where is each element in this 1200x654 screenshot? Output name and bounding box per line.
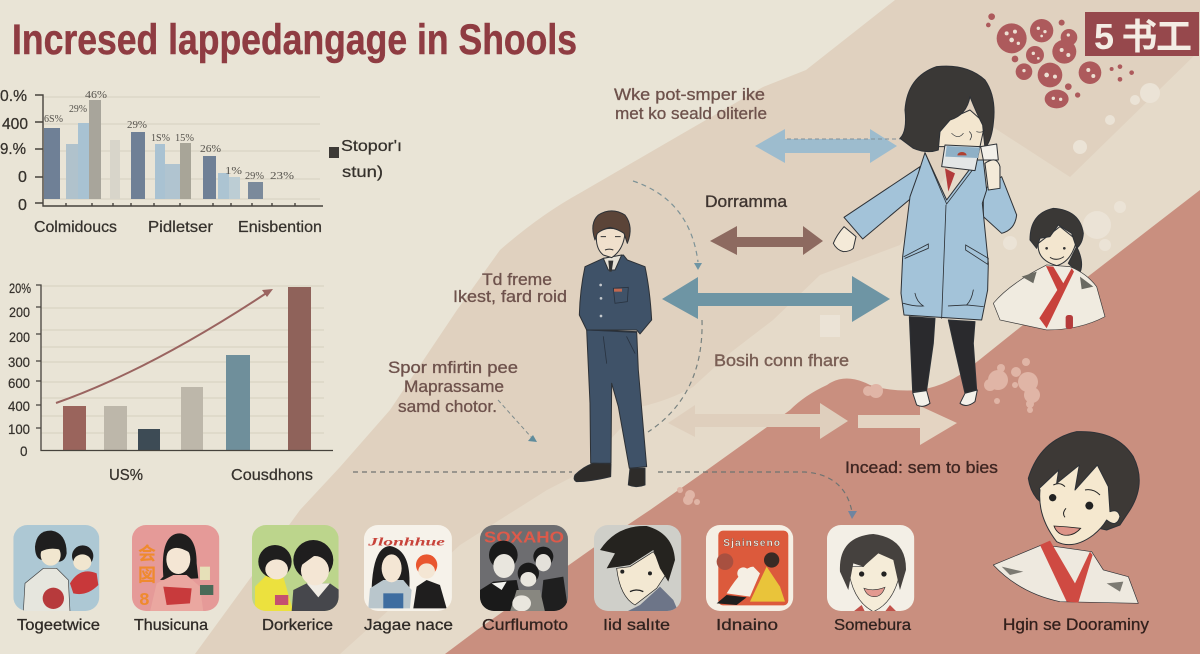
y axis labels: 0 [20, 444, 28, 459]
icon row: eight character tiles [13, 525, 914, 612]
y axis labels: 600 [8, 376, 30, 391]
label: Iid salite: Iid salıte [603, 617, 670, 634]
y axis labels: 100 [8, 422, 30, 437]
label: Curflumoto: Curflumoto [482, 617, 568, 634]
arrow: dashed curve lower [648, 320, 702, 432]
arrow: brown double [710, 226, 823, 255]
icon: woman with characters: 8 [139, 589, 149, 609]
icon: woman with characters: 会 [138, 544, 156, 564]
text: top caption: met ko seald oliterle [615, 105, 767, 123]
x axis labels: US% [109, 467, 143, 484]
figure: child in white kimono [993, 208, 1105, 330]
arrow: pale double [668, 403, 848, 439]
text: lower left caption: Maprassame [404, 378, 504, 396]
value labels [44, 89, 294, 182]
badge: top-right label: 5 书工 [1094, 16, 1192, 57]
value labels: 23% [270, 170, 294, 182]
icon: blossom cluster [986, 13, 1134, 108]
title: Incresed lappedangage in Shools [12, 16, 577, 64]
text: portrait caption: Hgin se Dooraminy [1003, 616, 1150, 634]
arrow: trend line [56, 289, 273, 403]
x axis labels: Pidletser [148, 219, 214, 236]
arrow: teal double [662, 276, 890, 322]
icon: red comic cover: Sjainseno [723, 538, 780, 549]
legend: Stopor'ı [341, 138, 402, 155]
axes [36, 285, 333, 450]
label: Idnaino: Idnaino [716, 617, 778, 634]
icon: boy and man with glasses [252, 525, 339, 612]
arrow: dashed curve upper [633, 181, 702, 270]
text: lower right caption: Incead: sem to bies [845, 458, 998, 477]
figure: smiling boy portrait [993, 432, 1139, 603]
figure: man in navy suit [574, 211, 652, 487]
legend: stun) [342, 164, 383, 181]
bars [63, 287, 311, 450]
legs [909, 317, 977, 406]
y axis labels: 0 [18, 169, 27, 186]
text: Dorramma: Dorramma [705, 192, 788, 211]
icon: smiling boy tile [827, 525, 914, 612]
y axis labels: 20% [9, 281, 31, 296]
y axis labels: 0 [18, 197, 27, 214]
text: top caption: Wke pot-smper ike [614, 86, 765, 104]
y axis labels: 400 [8, 399, 30, 414]
arrow: pale right [858, 406, 957, 445]
text: top caption [614, 86, 767, 123]
value labels: 46% [85, 89, 107, 101]
value labels: 6S% [44, 113, 63, 125]
label: Thusicuna: Thusicuna [134, 617, 208, 634]
text: left caption [453, 271, 567, 306]
x axis labels [109, 467, 313, 484]
y axis labels [0, 88, 28, 214]
x axis labels: Enisbention [238, 219, 322, 236]
arrow: dashed small [498, 400, 537, 442]
value labels: 15% [175, 132, 194, 144]
x axis labels: Cousdhons [231, 467, 313, 484]
y axis labels: 9.% [0, 141, 26, 158]
label: Jagae nace: Jagae nace [364, 617, 453, 634]
icon: young man close-up [594, 525, 681, 612]
icon: group poster [480, 525, 568, 612]
coat and head [833, 66, 1017, 320]
y axis labels: 0.% [0, 88, 27, 105]
x axis labels [34, 219, 322, 236]
x axis labels: Colmidoucs [34, 219, 117, 236]
label: Togeetwice: Togeetwice [17, 617, 100, 634]
icon: woman with characters: 図 [138, 566, 156, 586]
icon: poster with two figures [364, 525, 452, 611]
text: lower left caption: Spor mfirtin pee [388, 359, 518, 377]
y axis labels: 200 [9, 305, 30, 320]
value labels: 1S% [151, 132, 170, 144]
figure: woman in blue coat [833, 66, 1017, 406]
icon: poster with two figures: Jlonhhue [367, 534, 446, 548]
text: lower left caption: samd chotor. [398, 398, 497, 416]
icon: mother and child [13, 525, 99, 612]
text: lower left caption [388, 359, 518, 416]
value labels: 29% [127, 119, 147, 131]
bars [44, 100, 263, 199]
icon: group poster: SOXAHO [484, 530, 564, 547]
text: left caption: Td freme [482, 271, 552, 289]
text: left caption: Ikest, fard roid [453, 288, 567, 306]
arrow: long dashed line [353, 472, 857, 519]
icon: red comic cover [706, 525, 793, 611]
icon: woman with characters [132, 525, 219, 612]
value labels: 26% [200, 143, 221, 155]
label: Somebura: Somebura [834, 617, 911, 634]
value labels: 29% [69, 103, 87, 115]
y axis labels [8, 281, 31, 459]
axes [35, 95, 323, 206]
label: Dorkerice: Dorkerice [262, 617, 333, 634]
y axis labels: 200 [9, 330, 30, 345]
arrow: light blue double [755, 129, 902, 163]
value labels: 29% [245, 170, 264, 182]
bar chart: rising trend [8, 281, 333, 484]
y axis labels: 300 [8, 355, 30, 370]
value labels: 1% [225, 165, 242, 177]
legend [329, 138, 402, 181]
y axis labels: 400 [2, 116, 28, 133]
bar chart: percentages by group [0, 88, 323, 236]
text: middle right caption: Bosih conn fhare [714, 351, 849, 370]
